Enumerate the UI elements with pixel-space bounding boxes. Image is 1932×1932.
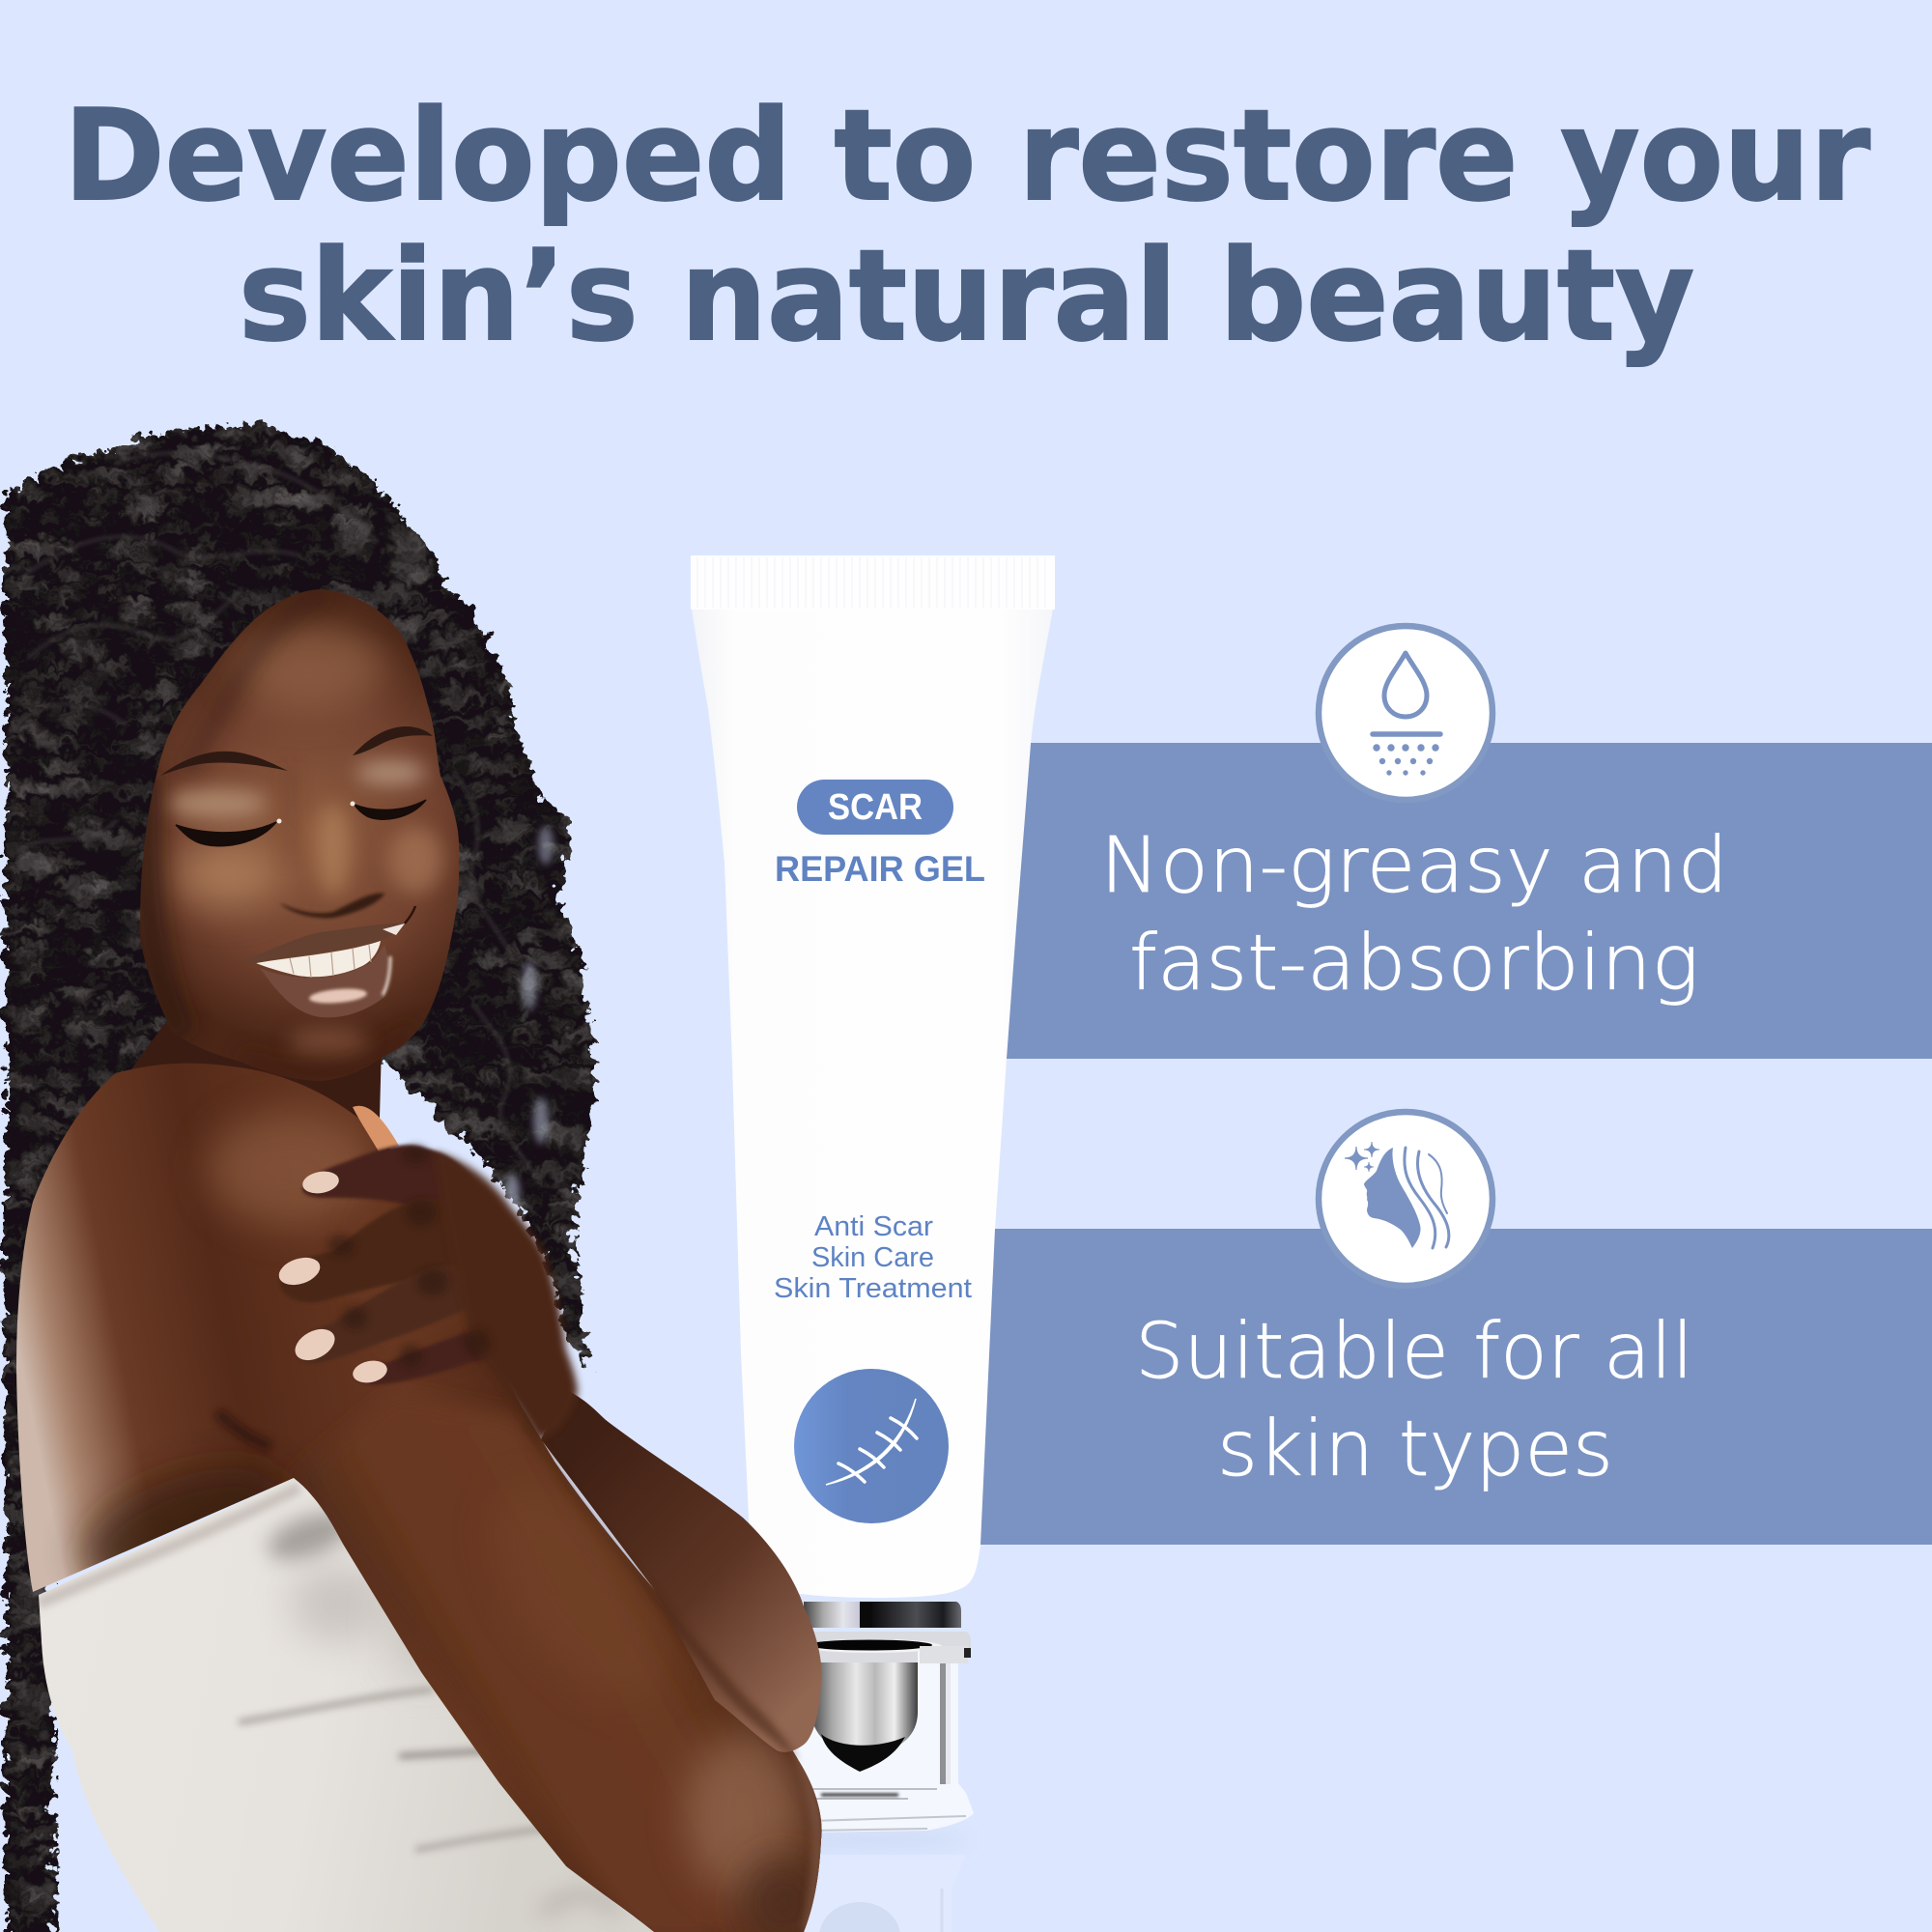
back, shoulder and upper arm [0, 1053, 850, 1932]
finger 3 [297, 1265, 512, 1363]
label icon: stitched scar [794, 1369, 949, 1523]
label pill: SCAR: SCAR [828, 787, 923, 828]
tube nozzle with metal applicator [787, 1602, 974, 1833]
band [966, 1229, 1932, 1545]
benefit text: Non-greasy and [1100, 821, 1728, 910]
label: product claims: Skin Treatment [774, 1273, 972, 1304]
thumb behind shoulder [353, 1106, 399, 1151]
title line 1: Developed to restore your [64, 82, 1870, 229]
nose shadow [280, 894, 384, 918]
icon: droplet absorbing into skin [1319, 626, 1492, 800]
benefit text [1100, 821, 1728, 1008]
finger 2 [279, 1199, 497, 1302]
icon: woman profile with sparkles [1319, 1112, 1492, 1286]
tube body [692, 609, 1053, 1598]
panel: non-greasy benefit [966, 626, 1932, 1059]
product: scar repair gel tube [691, 555, 1055, 1833]
benefit text: Suitable for all [1135, 1307, 1693, 1396]
panel: all skin types benefit [966, 1112, 1932, 1545]
finger 1 [302, 1145, 483, 1212]
face [140, 589, 460, 1081]
label: product claims [774, 1211, 972, 1304]
benefit text: skin types [1217, 1405, 1613, 1493]
benefit text: fast-absorbing [1129, 919, 1699, 1008]
photo: smiling woman touching her shoulder [0, 396, 850, 1932]
upper arm front overlap [522, 1406, 799, 1761]
label: product claims: Skin Care [811, 1242, 934, 1273]
label: REPAIR GEL: REPAIR GEL [775, 849, 985, 889]
benefit text [1135, 1307, 1693, 1493]
long curly hair [0, 396, 618, 1932]
forearm [541, 1390, 822, 1752]
neck [126, 1024, 382, 1154]
finger 4 [355, 1329, 517, 1384]
fingernails [275, 1169, 389, 1386]
product reflection [778, 1831, 971, 1932]
band [966, 743, 1932, 1059]
towel wrap [29, 1468, 667, 1932]
tube crimp seal [691, 555, 1055, 610]
eyebrows [160, 752, 288, 776]
title [64, 82, 1870, 369]
closed eyes [176, 822, 276, 846]
title line 2: skin’s natural beauty [239, 222, 1694, 369]
hand resting on the shoulder [275, 1145, 578, 1439]
back of hand [435, 1151, 578, 1439]
label pill: SCAR [797, 780, 953, 835]
lips and smile [244, 906, 415, 1017]
label: product claims: Anti Scar [814, 1211, 933, 1242]
knuckles [327, 1145, 491, 1368]
